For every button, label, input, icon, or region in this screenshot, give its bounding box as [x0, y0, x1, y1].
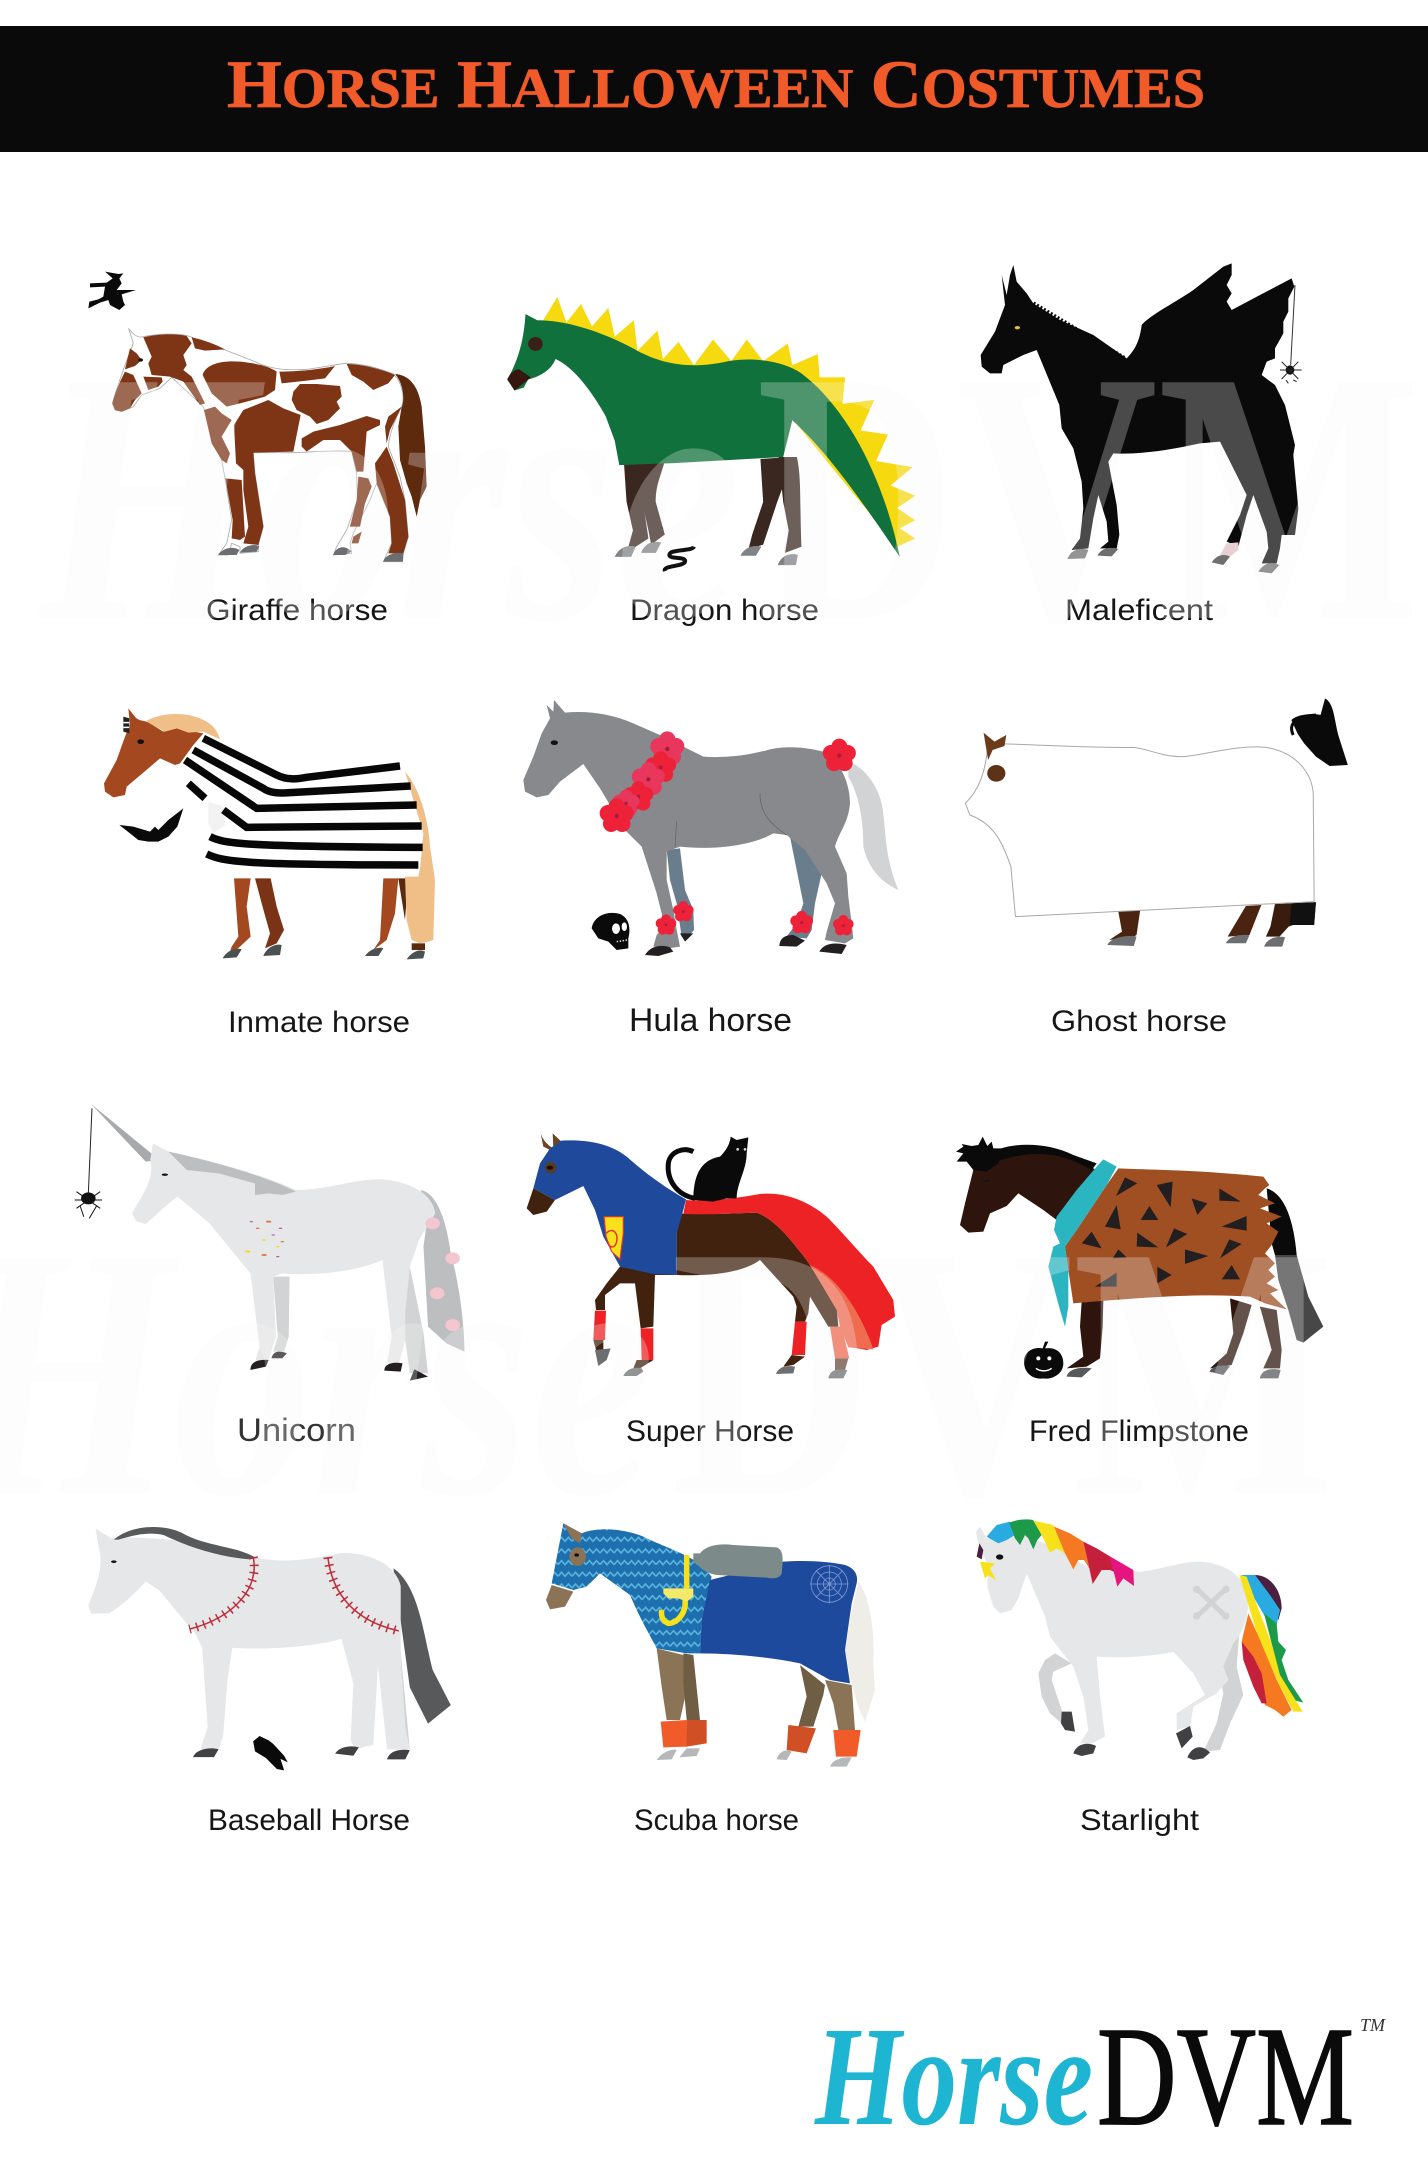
- scuba horse illustration: [546, 1523, 875, 1767]
- icon: jack-o-lantern: [1024, 1342, 1063, 1379]
- ghost horse illustration: [965, 698, 1348, 947]
- label: Scuba horse: Scuba horse: [634, 1804, 799, 1837]
- watermarks: [0, 297, 1420, 1571]
- Fred Flimpstone illustration: [956, 1137, 1323, 1379]
- starlight rainbow horse illustration: [976, 1519, 1303, 1760]
- label: Baseball Horse: Baseball Horse: [208, 1804, 410, 1837]
- panel: Unicorn: [75, 1104, 464, 1448]
- logo: HorseDVM: [813, 1997, 1386, 2155]
- giraffe horse illustration: [88, 272, 427, 562]
- label: Unicorn: Unicorn: [237, 1412, 356, 1448]
- icon: snake: [665, 547, 694, 571]
- label: Hula horse: Hula horse: [629, 1002, 792, 1038]
- panel: Dragon horse: [507, 297, 915, 627]
- panel: Inmate horse: [104, 708, 435, 1039]
- icon: bat: [119, 808, 183, 842]
- icon: voodoo doll: [253, 1736, 288, 1770]
- label: Dragon horse: Dragon horse: [630, 594, 819, 627]
- panel: Ghost horse: [965, 698, 1348, 1038]
- panel: Baseball Horse: [88, 1527, 451, 1837]
- hula horse illustration: [523, 700, 898, 956]
- icon: witch on broom: [88, 272, 136, 310]
- icon: crossbones: [1193, 1586, 1230, 1620]
- title: HORSE HALLOWEEN COSTUMES: [227, 46, 1205, 122]
- panel: Giraffe horse: [88, 272, 427, 627]
- label: Fred Flimpstone: Fred Flimpstone: [1029, 1415, 1249, 1448]
- label: Starlight: Starlight: [1080, 1804, 1200, 1837]
- icon: hanging spider: [75, 1108, 102, 1218]
- dragon horse illustration: [507, 297, 915, 571]
- flower lei and anklets: [600, 731, 856, 935]
- icon: black cat: [668, 1137, 748, 1202]
- icon: grim reaper: [1291, 698, 1348, 766]
- logo: HorseDVM: DVM: [1097, 1997, 1354, 2155]
- logo: HorseDVM: Horse: [813, 1997, 1093, 2155]
- rainbow tail: [1239, 1575, 1303, 1717]
- panel: Scuba horse: [546, 1523, 875, 1837]
- panel: Super Horse: [527, 1133, 895, 1448]
- label: Super Horse: Super Horse: [626, 1415, 794, 1448]
- icon: skull: [592, 913, 629, 950]
- super horse illustration: [527, 1133, 895, 1378]
- label: Inmate horse: Inmate horse: [228, 1006, 410, 1039]
- panel: Hula horse: [523, 700, 898, 1038]
- panel: Starlight: [976, 1519, 1303, 1837]
- label: Maleficent: Maleficent: [1065, 594, 1214, 627]
- unicorn illustration: [75, 1104, 464, 1381]
- panel: Fred Flimpstone: [956, 1137, 1323, 1448]
- logo: HorseDVM: TM: [1360, 2015, 1386, 2035]
- icon: hanging spider: [1280, 285, 1302, 383]
- confetti dots: [245, 1221, 284, 1257]
- title banner: [0, 26, 1428, 152]
- label: Giraffe horse: Giraffe horse: [206, 594, 388, 627]
- rainbow mane: [987, 1519, 1134, 1587]
- icon: snorkel and mask: [661, 1555, 693, 1623]
- watermarks: Horse: [36, 297, 740, 696]
- inmate horse illustration: [104, 708, 435, 959]
- panel: Maleficent: [981, 263, 1302, 627]
- Maleficent winged horse illustration: [981, 263, 1302, 573]
- label: Ghost horse: Ghost horse: [1051, 1005, 1227, 1038]
- baseball horse illustration: [88, 1527, 451, 1770]
